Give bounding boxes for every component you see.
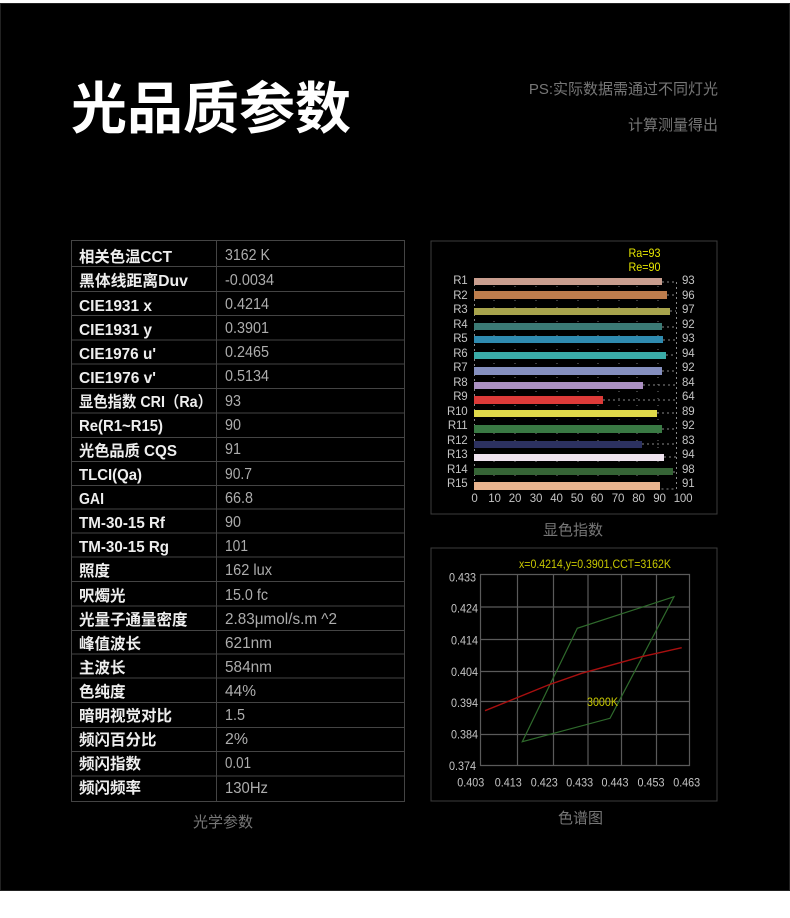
- x axis labels: 20: [509, 493, 521, 505]
- value labels: 98: [682, 464, 694, 476]
- panel: color rendering index chart: [431, 241, 717, 514]
- row: TM-30-15 Rf: 90: [225, 514, 241, 531]
- row: CCT: 3162 K: [225, 247, 271, 264]
- row: CCT: [79, 247, 271, 266]
- row: CCT: 相关色温CCT: [79, 247, 173, 266]
- row: flicker frequency: 130Hz: [225, 780, 268, 797]
- x axis labels: 0.433: [566, 776, 593, 790]
- row: dominant wavelength: 主波长: [79, 659, 126, 677]
- row: CQS: 光色品质 CQS: [79, 441, 177, 460]
- y axis labels: 0.424: [451, 602, 478, 616]
- value labels: 83: [682, 435, 694, 447]
- value labels: 92: [682, 362, 694, 374]
- row: CIE1931 y: CIE1931 y: [79, 322, 152, 339]
- row: CQS: [79, 441, 241, 460]
- row: CIE1976 u': [79, 344, 269, 363]
- row: color purity: [79, 682, 256, 701]
- row: flicker index: 0.01: [225, 755, 251, 772]
- x axis labels: 10: [488, 493, 501, 505]
- value labels: 84: [682, 377, 695, 389]
- row labels R1 to R15: R4: [453, 319, 468, 331]
- row labels R1 to R15: R10: [447, 406, 468, 418]
- x axis labels: [457, 776, 700, 790]
- row: foot-candle: [79, 587, 268, 605]
- row labels R1 to R15: R13: [447, 449, 468, 461]
- value labels: 92: [682, 420, 694, 432]
- value labels: 64: [682, 391, 695, 403]
- row labels R1 to R15: R15: [447, 478, 468, 490]
- row labels R1 to R15: R14: [447, 464, 468, 476]
- row: GAI: 66.8: [225, 490, 253, 507]
- row: GAI: GAI: [79, 491, 104, 508]
- row: S/P ratio: 1.5: [225, 707, 245, 724]
- row: Re: [79, 417, 241, 435]
- row: GAI: [79, 490, 253, 508]
- row: photon flux density: [79, 610, 337, 629]
- row: illuminance: [79, 561, 272, 580]
- row: Duv: 黑体线距离Duv: [79, 271, 188, 290]
- row: CIE1931 x: [79, 296, 269, 315]
- y axis labels: 0.433: [449, 570, 476, 584]
- x axis labels: 40: [550, 493, 563, 505]
- row labels R1 to R15: R6: [453, 348, 468, 360]
- caption: color rendering index: 显色指数: [543, 522, 603, 539]
- legend: Ra and Re: Re=90: [628, 260, 661, 274]
- row: flicker frequency: 频闪频率: [79, 778, 141, 797]
- x axis labels: 90: [653, 493, 666, 505]
- y axis labels: 0.384: [451, 728, 478, 742]
- row: color purity: 44%: [225, 683, 256, 700]
- note text: 计算测量得出: [628, 116, 718, 134]
- row labels R1 to R15: R2: [453, 290, 468, 302]
- row: CIE1976 v': [79, 368, 269, 387]
- 3000K label: 3000K: [587, 695, 618, 709]
- x axis labels: 0.453: [638, 776, 665, 790]
- row: peak wavelength: 621nm: [225, 635, 272, 652]
- value labels: 93: [682, 333, 694, 345]
- row: foot-candle: 15.0 fc: [225, 587, 268, 604]
- row: flicker percent: 2%: [225, 731, 248, 748]
- row labels R1 to R15: R12: [447, 435, 468, 447]
- y axis labels: 0.394: [451, 696, 478, 710]
- row: peak wavelength: 峰值波长: [79, 635, 142, 653]
- plot grid: [480, 574, 690, 766]
- row: CIE1976 v': 0.5134: [225, 368, 269, 385]
- row: TLCI: TLCI(Qa): [79, 467, 142, 484]
- row: CRI: 93: [225, 393, 241, 410]
- row: CIE1976 v': CIE1976 v': [79, 370, 156, 387]
- x axis labels: 0.463: [673, 776, 700, 790]
- row: Duv: -0.0034: [225, 272, 274, 289]
- value labels: 94: [682, 449, 695, 461]
- row: flicker index: 频闪指数: [79, 755, 142, 773]
- note text: PS:实际数据需通过不同灯光: [529, 81, 718, 98]
- row: CIE1931 x: 0.4214: [225, 296, 269, 313]
- row: Re: 90: [225, 417, 241, 434]
- planckian locus curve: [485, 648, 682, 711]
- caption: optical parameters: 光学参数: [193, 814, 253, 831]
- row labels R1 to R15: R8: [453, 377, 468, 389]
- x axis labels: 0.403: [457, 776, 485, 790]
- y axis labels: [449, 570, 478, 773]
- row: flicker percent: [79, 731, 248, 749]
- row: photon flux density: 光量子通量密度: [79, 610, 188, 629]
- value labels: [682, 275, 695, 490]
- row: CIE1931 y: 0.3901: [225, 320, 269, 337]
- x axis labels: 0: [471, 493, 478, 505]
- row: illuminance: 照度: [79, 561, 111, 580]
- value labels: 94: [682, 348, 695, 360]
- row: TM-30-15 Rf: TM-30-15 Rf: [79, 515, 166, 532]
- row: TLCI: 90.7: [225, 466, 252, 483]
- row labels R1 to R15: R3: [453, 304, 468, 316]
- row: CIE1931 x: CIE1931 x: [79, 298, 152, 315]
- row: Duv: [79, 271, 274, 290]
- x axis labels: [471, 493, 692, 505]
- legend: Ra and Re: [628, 246, 661, 274]
- row labels R1 to R15: R5: [453, 333, 468, 345]
- row: foot-candle: 呎燭光: [79, 587, 126, 605]
- row: photon flux density: 2.83μmol/s.m ^2: [225, 611, 337, 628]
- value labels: 96: [682, 290, 694, 302]
- row: TLCI: [79, 466, 252, 484]
- row: flicker percent: 频闪百分比: [79, 731, 157, 749]
- note text: [529, 81, 718, 134]
- row: CQS: 91: [225, 441, 241, 458]
- value labels: 89: [682, 406, 694, 418]
- value labels: 92: [682, 319, 694, 331]
- x axis labels: 80: [632, 493, 645, 505]
- legend: Ra and Re: Ra=93: [628, 246, 661, 260]
- row: dominant wavelength: [79, 659, 272, 677]
- row: peak wavelength: [79, 635, 272, 653]
- x axis labels: 50: [571, 493, 583, 505]
- row: TM-30-15 Rg: [79, 538, 248, 556]
- bars R1 to R15: [474, 278, 673, 490]
- value labels: 91: [682, 478, 694, 490]
- y axis labels: 0.374: [449, 759, 476, 773]
- row: TM-30-15 Rg: TM-30-15 Rg: [79, 539, 169, 556]
- row: color purity: 色纯度: [79, 682, 126, 701]
- value labels: 93: [682, 275, 694, 287]
- x axis labels: 0.423: [531, 776, 558, 790]
- y axis labels: 0.414: [451, 634, 478, 648]
- row: flicker frequency: [79, 778, 268, 797]
- panel: optical parameters table: [72, 240, 404, 802]
- row: TM-30-15 Rg: 101: [225, 538, 248, 555]
- row labels R1 to R15: R1: [453, 275, 468, 287]
- caption: chromaticity diagram: 色谱图: [558, 810, 603, 827]
- chart title: x=0.4214,y=0.3901,CCT=3162K: [519, 557, 671, 571]
- row: CIE1976 u': 0.2465: [225, 344, 269, 361]
- row labels R1 to R15: R11: [448, 420, 468, 432]
- row: CIE1976 u': CIE1976 u': [79, 346, 156, 363]
- row: S/P ratio: 暗明视觉对比: [79, 707, 172, 725]
- 3000K quadrangle: [522, 597, 674, 742]
- row: dominant wavelength: 584nm: [225, 659, 272, 676]
- title: 光品质参数: [71, 78, 351, 140]
- x axis labels: 30: [530, 493, 542, 505]
- x axis labels: 70: [612, 493, 624, 505]
- y axis labels: 0.404: [451, 665, 478, 679]
- row: TM-30-15 Rf: [79, 514, 241, 532]
- row: S/P ratio: [79, 707, 245, 725]
- x axis labels: 60: [591, 493, 603, 505]
- row: CIE1931 y: [79, 320, 269, 339]
- row labels R1 to R15: R7: [453, 362, 468, 374]
- row: CRI: 显色指数 CRI（Ra）: [79, 392, 212, 411]
- row: flicker index: [79, 755, 251, 773]
- panel: chromaticity chart: [431, 548, 717, 801]
- row labels R1 to R15: [447, 275, 468, 490]
- value labels: 97: [682, 304, 694, 316]
- row: Re: Re(R1~R15): [79, 418, 163, 435]
- x axis labels: 0.443: [602, 776, 629, 790]
- x axis labels: 100: [674, 493, 692, 505]
- x axis labels: 0.413: [495, 776, 522, 790]
- row labels R1 to R15: R9: [453, 391, 468, 403]
- row: illuminance: 162 lux: [225, 562, 272, 579]
